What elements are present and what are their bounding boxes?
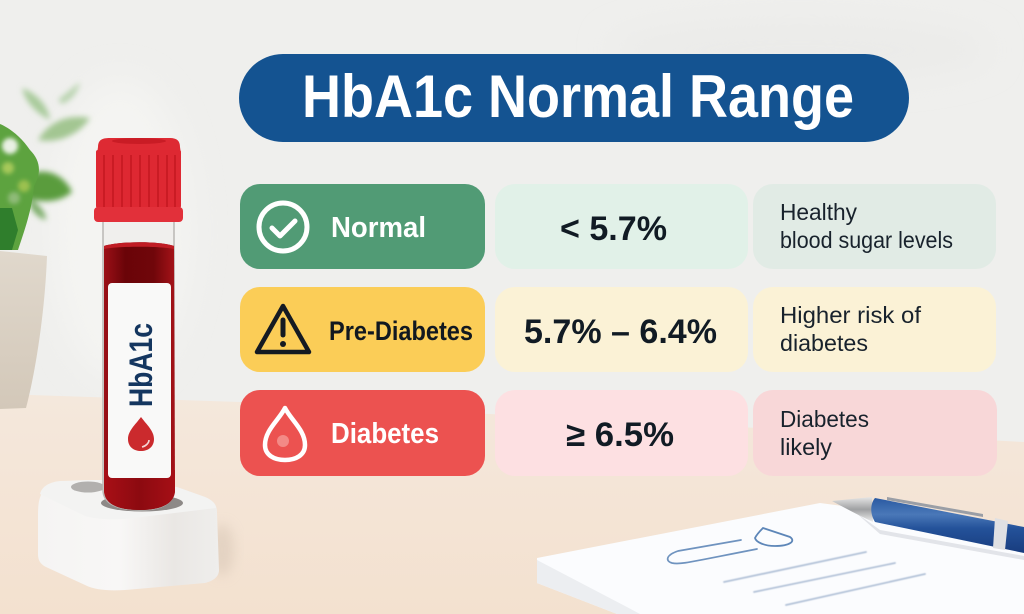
icon: warning triangle bbox=[257, 306, 309, 352]
row: pre-diabetes bbox=[240, 287, 996, 372]
icon: check circle bbox=[259, 203, 307, 251]
status label: pre-diabetes bbox=[240, 287, 485, 372]
cap bbox=[94, 138, 183, 222]
paper clip sketch bbox=[668, 540, 757, 564]
blood bbox=[104, 242, 175, 510]
flower pot bbox=[0, 251, 47, 409]
title banner: HbA1c Normal Range bbox=[302, 63, 854, 130]
note: pre-diabetes: Higher risk of bbox=[780, 302, 922, 328]
icon: blood drop bbox=[128, 417, 154, 451]
status label: normal: Normal bbox=[331, 212, 426, 244]
status label: pre-diabetes: Pre-Diabetes bbox=[329, 316, 473, 346]
note: normal: Healthy bbox=[780, 199, 857, 225]
plant in pot bbox=[0, 82, 90, 409]
paper notepad bbox=[537, 503, 1024, 614]
note: normal: blood sugar levels bbox=[780, 227, 953, 253]
row: normal bbox=[240, 184, 996, 269]
range: diabetes: ≥ 6.5% bbox=[566, 416, 674, 454]
range: normal bbox=[495, 184, 748, 269]
status label: diabetes: Diabetes bbox=[331, 418, 439, 450]
test tube in stand bbox=[38, 138, 234, 590]
note: normal bbox=[753, 184, 996, 269]
wooden desk bbox=[0, 394, 1024, 614]
background wall bbox=[0, 0, 1024, 480]
status label: normal bbox=[240, 184, 485, 269]
icon: drop sketch on paper bbox=[755, 528, 792, 546]
tube label bbox=[108, 283, 171, 478]
range: normal: < 5.7% bbox=[560, 210, 667, 248]
note: diabetes: likely bbox=[780, 434, 833, 460]
range: diabetes bbox=[495, 390, 748, 476]
status label: diabetes bbox=[240, 390, 485, 476]
tube label: HbA1c bbox=[123, 323, 159, 407]
note: diabetes: Diabetes bbox=[780, 406, 869, 432]
title banner bbox=[239, 54, 909, 142]
note: pre-diabetes bbox=[753, 287, 996, 372]
row: diabetes bbox=[240, 390, 997, 476]
icon: hollow drop bbox=[265, 408, 305, 460]
plant foliage mass bbox=[0, 124, 39, 250]
note: pre-diabetes: diabetes bbox=[780, 330, 868, 356]
range: pre-diabetes: 5.7% – 6.4% bbox=[524, 313, 717, 351]
note: diabetes bbox=[753, 390, 997, 476]
soft wall light bbox=[50, 20, 990, 380]
stand bbox=[38, 480, 234, 590]
pen bbox=[832, 497, 1024, 560]
text lines sketch bbox=[724, 552, 925, 605]
tube glass bbox=[103, 218, 174, 510]
range: pre-diabetes bbox=[495, 287, 748, 372]
